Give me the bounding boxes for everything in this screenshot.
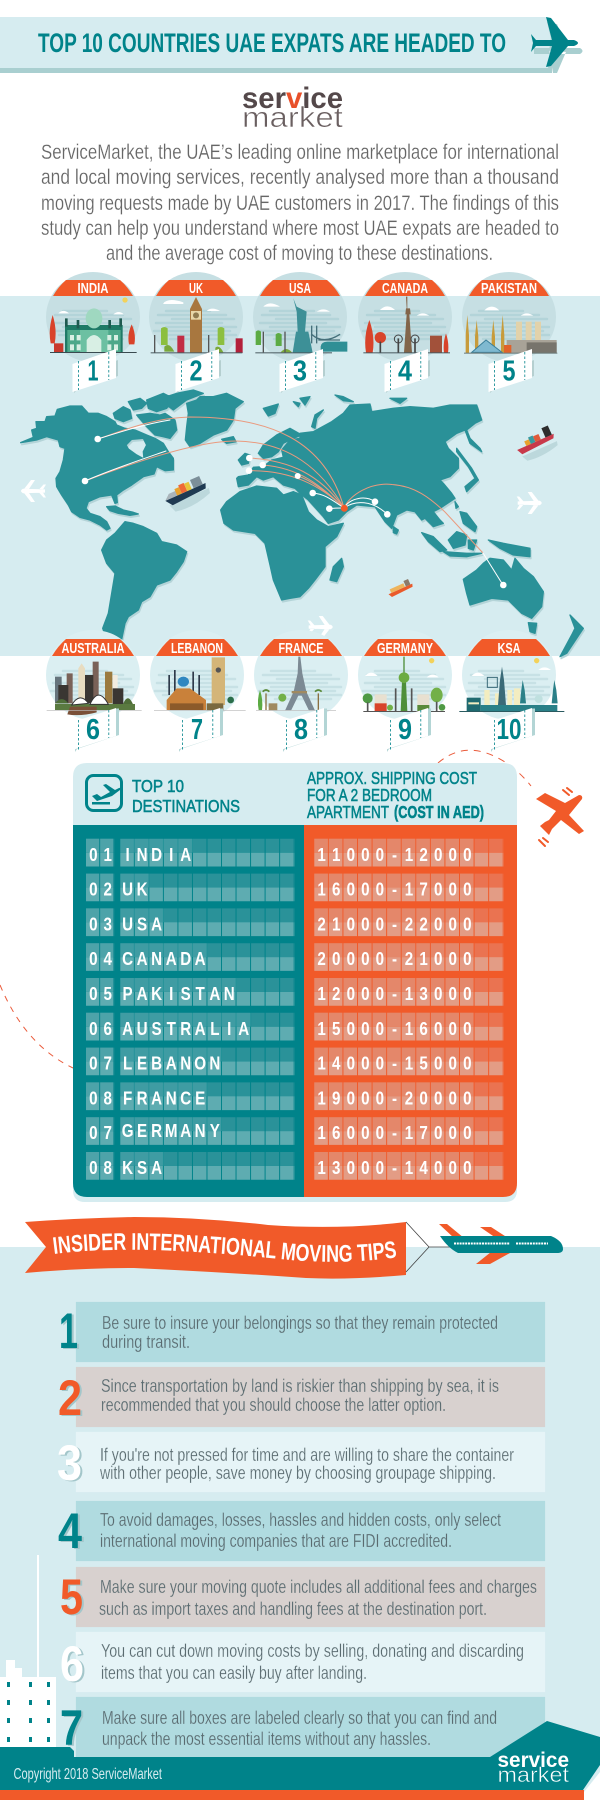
row 07: 07	[89, 1053, 112, 1074]
landmark: Taj Mahal	[50, 297, 137, 353]
rank tag 8: 8	[294, 714, 308, 746]
row 05: 05	[89, 984, 112, 1004]
landmark: Saudi skyline	[459, 658, 564, 712]
panel: Australia: AUSTRALIA	[62, 640, 125, 657]
icon: departing plane	[86, 776, 122, 810]
table: destinations and costs	[73, 763, 517, 1202]
heading: shipping cost: APPROX. SHIPPING COST	[307, 768, 477, 788]
row 03: 03	[89, 914, 112, 935]
icon: airplane in title	[531, 17, 582, 73]
rank tag 2: 2	[190, 356, 202, 388]
tip 6	[60, 1632, 545, 1692]
heading: top 10 destinations: DESTINATIONS	[132, 796, 240, 816]
tip 3	[57, 1432, 545, 1492]
panel: KSA	[459, 630, 564, 752]
world map	[21, 390, 583, 657]
landmark: Statue of Liberty	[255, 298, 347, 353]
heading: shipping cost: APARTMENT	[307, 802, 389, 822]
panel: Lebanon: LEBANON	[171, 640, 223, 657]
row 02: UK	[122, 879, 148, 900]
landmark: Eiffel Tower	[256, 657, 336, 711]
panel: Pakistan	[462, 272, 557, 393]
landmark: Sydney Opera House	[47, 662, 142, 715]
panel: KSA: KSA	[498, 640, 521, 657]
title banner	[0, 17, 582, 73]
panel: France	[254, 630, 348, 752]
heading: top 10 destinations	[132, 776, 240, 816]
tip 1: 1	[59, 1303, 78, 1359]
tip 5: 5	[60, 1569, 83, 1625]
row 04	[86, 943, 504, 970]
panel: map background	[0, 296, 600, 656]
heading: top 10 destinations: TOP 10	[132, 776, 184, 796]
icon: orange plane	[536, 788, 584, 846]
panel: USA	[253, 272, 347, 393]
row 04: 20000-21000	[317, 949, 472, 970]
rank tag 7: 7	[191, 714, 203, 746]
heading: shipping cost: (COST IN AED)	[394, 802, 484, 822]
row 05: 12000-13000	[317, 984, 472, 1004]
tip 2: 2	[58, 1370, 82, 1426]
icon: white plane south	[308, 616, 333, 638]
panel: Germany	[358, 630, 452, 752]
row 08: 19000-20000	[317, 1088, 472, 1109]
row 03: USA	[122, 914, 162, 935]
row 06: 06	[89, 1018, 112, 1039]
tip 7	[60, 1697, 545, 1759]
row 10	[86, 1152, 504, 1178]
panel: India	[46, 272, 140, 393]
panel: Germany: GERMANY	[377, 640, 433, 657]
dashed flight path right	[438, 750, 531, 786]
rank tag 5: 5	[502, 356, 516, 388]
row 09: 16000-17000	[317, 1123, 472, 1144]
tip 4: international moving companies that are FIDI accredited.	[100, 1530, 452, 1551]
logo: servicemarket: service	[242, 82, 343, 115]
panel: tips background	[0, 1247, 600, 1800]
intro paragraph	[41, 141, 559, 265]
tip 5	[60, 1567, 545, 1627]
landmark: Beirut mosque and clock tower	[154, 657, 246, 711]
tip 2	[58, 1367, 545, 1427]
row 08: FRANCE	[123, 1088, 205, 1109]
banner: insider international moving tips	[25, 1217, 406, 1279]
heading: shipping cost: FOR A 2 BEDROOM	[307, 785, 432, 805]
tip 4	[58, 1501, 545, 1561]
icon: cargo ship indian ocean	[386, 578, 414, 598]
row 08	[86, 1082, 504, 1109]
rank tag 9: 9	[398, 714, 412, 746]
panel: France: FRANCE	[278, 640, 324, 657]
dashed flight path left	[0, 985, 73, 1068]
panel: Canada	[358, 272, 452, 393]
rank tag 6: 6	[86, 714, 100, 746]
tip 6: items that you can easily buy after landing.	[101, 1662, 367, 1683]
panel: India: INDIA	[78, 280, 109, 297]
rank tag 4: 4	[398, 356, 412, 388]
row 02: 02	[89, 879, 112, 900]
panel: Lebanon	[150, 630, 246, 752]
panel: Australia	[46, 630, 142, 752]
panel: UK: UK	[189, 280, 203, 297]
row 06: AUSTRALIA	[122, 1018, 249, 1039]
tip 4: 4	[58, 1503, 82, 1559]
logo: footer servicemarket	[498, 1749, 569, 1787]
icon: white plane east	[517, 492, 542, 514]
banner: insider international moving tips: INSIDER INTERNATIONAL MOVING TIPS	[53, 1233, 396, 1262]
row 01: 11000-12000	[317, 844, 472, 865]
icon: towing plane	[439, 1224, 563, 1264]
row 06	[86, 1013, 504, 1039]
row 07: LEBANON	[123, 1053, 220, 1074]
panel: USA: USA	[289, 280, 311, 297]
tip 7: unpack the most essential items without any hassles.	[102, 1728, 431, 1749]
row 10: 08	[89, 1158, 112, 1178]
row 01: 01	[89, 844, 112, 865]
icon: cargo ship pacific	[513, 425, 560, 464]
row 04: CANADA	[122, 949, 206, 970]
panel: Canada: CANADA	[382, 280, 428, 297]
landmark: CN Tower	[363, 297, 450, 353]
rank tag 3: 3	[293, 356, 307, 388]
marker: Dubai origin	[341, 505, 348, 512]
row 03: 21000-22000	[317, 914, 472, 935]
tip 3: 3	[57, 1435, 82, 1491]
intro paragraph: and the average cost of moving to these destinations.	[106, 242, 493, 265]
row 10: KSA	[122, 1158, 162, 1178]
panel: Pakistan: PAKISTAN	[481, 280, 537, 297]
row 09: GERMANY	[122, 1121, 220, 1142]
row 09	[86, 1117, 504, 1144]
row 05: PAKISTAN	[123, 984, 235, 1004]
logo: footer servicemarket: service	[498, 1749, 569, 1772]
rank tag 10: 10	[496, 714, 522, 746]
row 03	[86, 908, 504, 935]
tip 7: 7	[60, 1700, 83, 1756]
row 07: 14000-15000	[317, 1053, 472, 1074]
icon: white plane west	[21, 480, 46, 502]
banner rope	[406, 1222, 455, 1272]
row 09: 07	[89, 1123, 112, 1144]
row 10: 13000-14000	[317, 1158, 472, 1178]
landmark: Big Ben	[151, 297, 243, 353]
flight routes	[85, 417, 503, 585]
row 05	[86, 978, 504, 1004]
tip 5: such as import taxes and handling fees at the destination port.	[99, 1598, 487, 1619]
destination markers	[82, 436, 507, 588]
logo: servicemarket: market	[242, 102, 343, 134]
row 06: 15000-16000	[317, 1018, 472, 1039]
skyline buildings	[0, 1555, 56, 1747]
row 02	[86, 874, 504, 900]
row 08: 08	[89, 1088, 112, 1109]
footer	[0, 1721, 600, 1800]
row 01	[86, 839, 504, 865]
panel: UK	[149, 272, 243, 393]
tip 6: 6	[60, 1636, 84, 1692]
tip 1: during transit.	[102, 1331, 190, 1352]
row 02: 16000-17000	[317, 879, 472, 900]
tip 2: recommended that you should choose the latter option.	[101, 1394, 446, 1415]
landmark: Faisal Mosque	[464, 307, 557, 354]
icon: cargo ship atlantic	[162, 474, 213, 515]
landmark: Berlin TV Tower	[363, 657, 445, 712]
tip 1	[59, 1302, 545, 1362]
logo: footer servicemarket: market	[498, 1764, 569, 1787]
heading: shipping cost	[307, 768, 484, 822]
row 07	[86, 1048, 504, 1074]
rank tag 1: 1	[88, 356, 98, 388]
copyright: Copyright 2018 ServiceMarket	[14, 1766, 162, 1783]
row 01: INDIA	[125, 844, 191, 865]
logo: servicemarket	[242, 82, 343, 134]
row 04: 04	[89, 949, 112, 970]
